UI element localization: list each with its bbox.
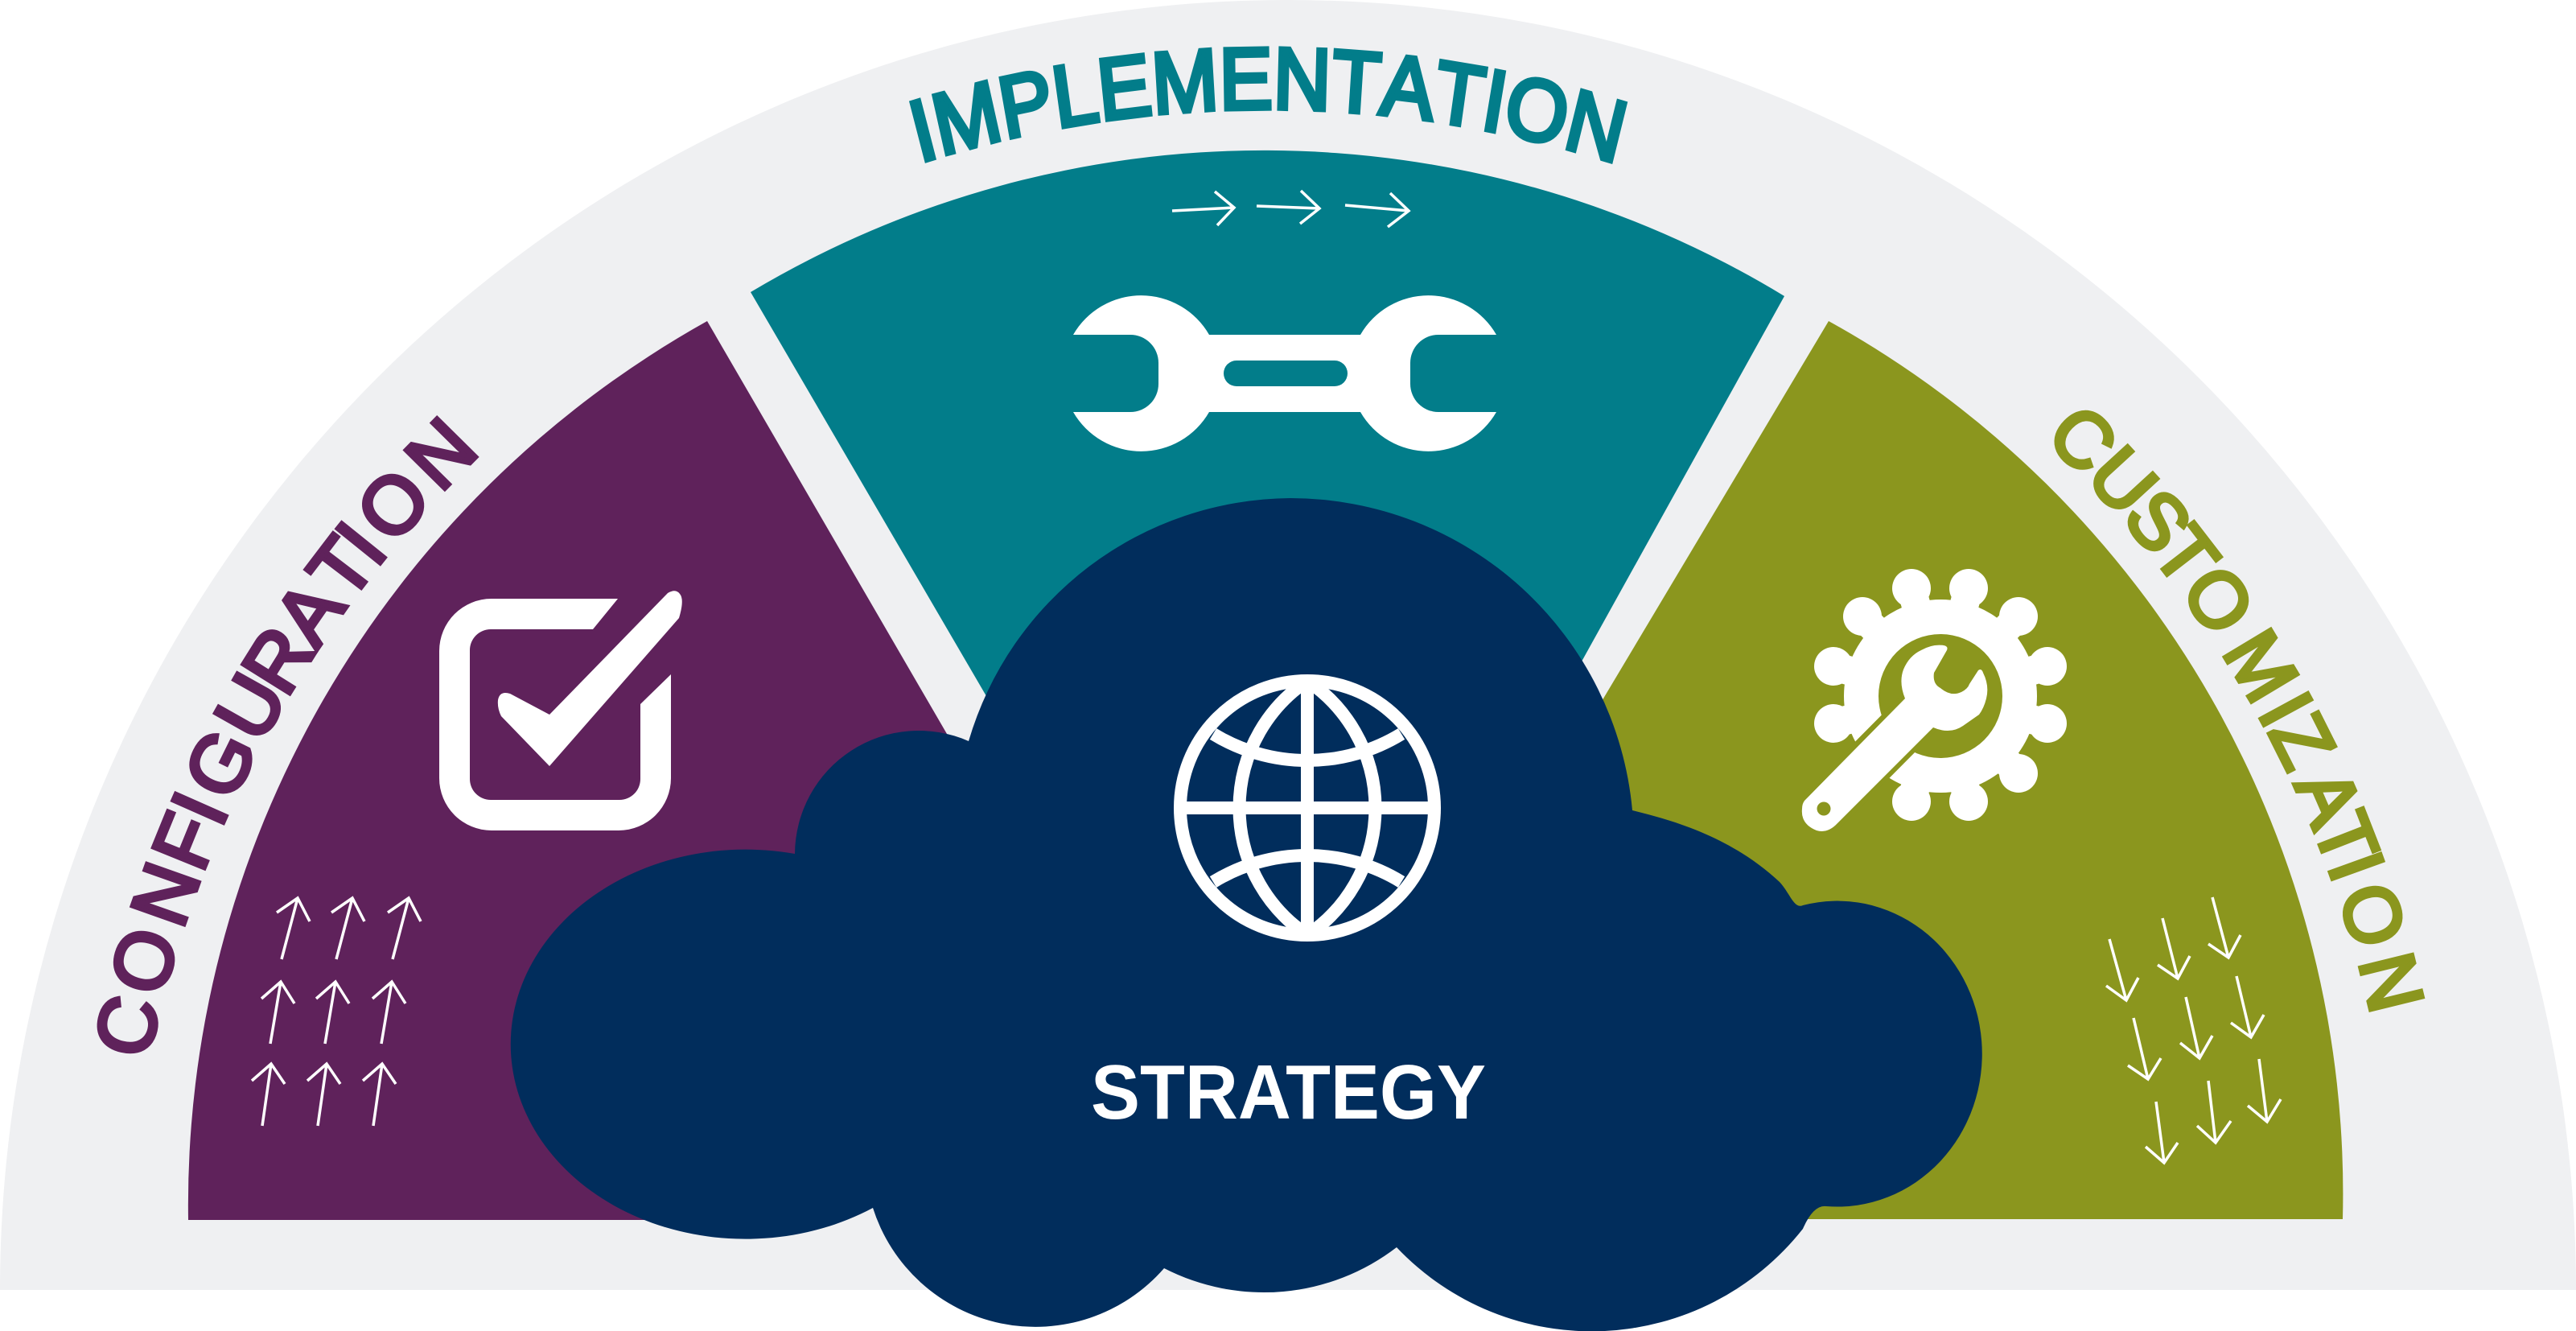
panel: implementation sector [751,150,1784,885]
heading: configuration: CONFIGURATION [97,415,479,1054]
icon: globe [1180,681,1434,935]
arrows: three rightward arrows [1172,191,1409,227]
heading: customization: CUSTOMIZATION [2055,410,2425,1012]
icon: gear with wrench [1802,569,2067,831]
panel: customization sector [1601,321,2343,1219]
panel: strategy cloud [511,498,1982,1331]
arrows: nine upward arrows [252,898,421,1126]
heading: strategy: STRATEGY [1091,1049,1486,1135]
panel: configuration sector [188,321,947,1220]
arrows: nine downward arrows [2106,897,2281,1163]
icon: double-ended wrench [1073,295,1496,451]
icon: checkbox [439,591,682,830]
heading: implementation: IMPLEMENTATION [909,46,1628,164]
